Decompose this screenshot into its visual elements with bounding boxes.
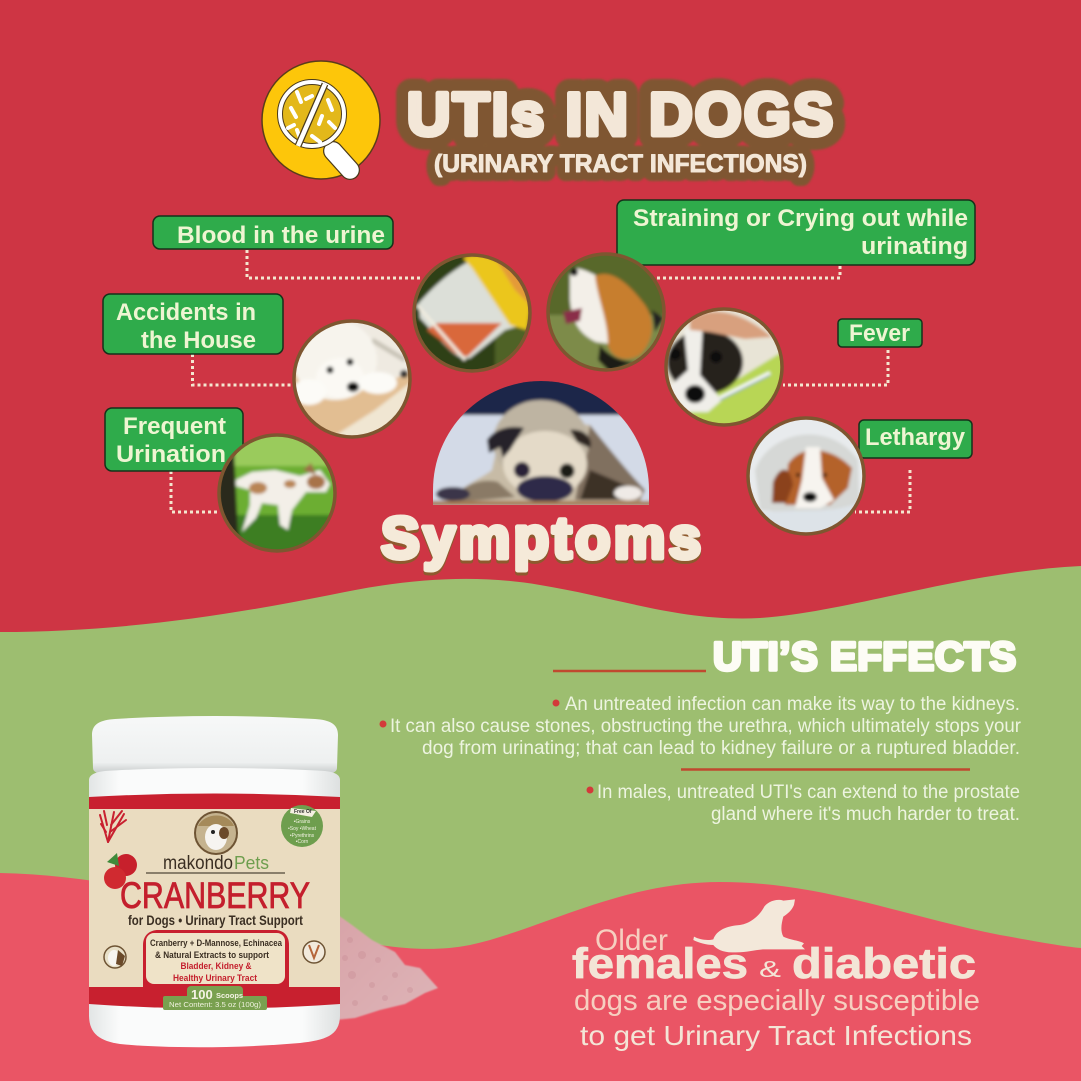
text block: older females and diabetic: diabetic <box>792 940 976 988</box>
label: frequent urination <box>105 408 243 471</box>
label: frequent urination: Frequent <box>123 413 226 440</box>
text block: older females and diabetic: & <box>759 956 781 982</box>
ingredients text: Bladder, Kidney & <box>180 961 252 972</box>
brand name: makondo <box>163 853 233 874</box>
jar label <box>89 794 340 1010</box>
icon: dog silhouette <box>693 899 805 952</box>
title: (URINARY TRACT INFECTIONS) <box>434 150 807 178</box>
label: straining or crying out: Straining or Crying out while <box>633 205 968 232</box>
title: UTIs IN DOGS <box>407 81 833 148</box>
text block: older females and diabetic <box>572 924 980 1051</box>
photo: dog urinating on tree <box>215 430 340 555</box>
label: fever: Fever <box>849 320 910 347</box>
label: accidents in the house: the House <box>141 327 256 354</box>
text block: effects: It can also cause stones, obstructing the urethra, which ultimately stops your <box>390 716 1022 737</box>
ingredients text: Cranberry + D-Mannose, Echinacea <box>150 938 283 949</box>
photo: beagle howling <box>545 250 670 375</box>
connector: fever <box>783 350 888 385</box>
product jar <box>89 716 340 1047</box>
text block: effects: dog from urinating; that can lead to kidney failure or a ruptured bladder. <box>422 738 1020 759</box>
connector: accidents in the house <box>192 354 293 385</box>
powder pile <box>335 915 438 1020</box>
photo: dog with thermometer <box>665 305 785 430</box>
brand logo <box>195 812 237 854</box>
heading: UTI's effects: UTI’S EFFECTS <box>713 635 1016 679</box>
label: straining or crying out: urinating <box>861 233 968 260</box>
brand name: Pets <box>234 853 269 873</box>
title: (URINARY TRACT INFECTIONS) <box>434 150 807 178</box>
text block: older females and diabetic: females <box>572 940 748 988</box>
scoops tag <box>163 986 267 1010</box>
icon: magnifying glass with bacteria <box>262 61 380 179</box>
label: accidents in the house <box>103 294 283 354</box>
text block: older females and diabetic: to get Urinary Tract Infections <box>580 1020 972 1051</box>
free-of badge: •Corn <box>296 839 309 845</box>
ingredients text: Healthy Urinary Tract <box>173 973 258 984</box>
jar lid <box>92 716 338 774</box>
scoops tag: 100 <box>191 987 213 1002</box>
free-of badge: •Grains <box>294 819 311 825</box>
product subtitle: for Dogs • Urinary Tract Support <box>128 913 303 928</box>
connector: frequent urination <box>171 471 219 512</box>
connector: blood in the urine <box>247 250 423 278</box>
free-of badge: •Soy •Wheat <box>288 826 317 832</box>
label: blood in the urine: Blood in the urine <box>177 222 385 249</box>
photo: urine sample jar <box>412 253 532 373</box>
connector: straining <box>657 266 840 278</box>
label: accidents in the house: Accidents in <box>116 299 256 326</box>
title: UTIs IN DOGS <box>407 81 833 148</box>
text block: effects: In males, untreated UTI's can extend to the prostate <box>597 782 1020 803</box>
jar body <box>89 768 340 1047</box>
photo: white puppy on floor <box>292 319 412 439</box>
cranberry fruit <box>104 853 137 889</box>
free-of badge: Free Of <box>294 809 312 815</box>
heading: symptoms: Symptoms <box>381 506 701 571</box>
text block: effects: An untreated infection can make its way to the kidneys. <box>565 694 1020 715</box>
product name: CRANBERRY <box>120 875 310 916</box>
label: lethargy <box>859 420 972 458</box>
label: frequent urination: Urination <box>116 441 226 468</box>
text block: effects <box>380 694 1022 825</box>
title <box>407 81 833 178</box>
label: blood in the urine <box>153 216 393 249</box>
pink wave background <box>0 873 1081 1081</box>
scoops tag: Scoops <box>216 991 243 1000</box>
text block: older females and diabetic: Older <box>595 924 668 957</box>
text block: effects: gland where it's much harder to treat. <box>711 804 1020 825</box>
ingredients text: & Natural Extracts to support <box>155 950 270 961</box>
label: lethargy: Lethargy <box>865 424 966 451</box>
connector: lethargy <box>855 470 910 512</box>
heading: symptoms: Symptoms <box>381 509 701 574</box>
text block: older females and diabetic: dogs are especially susceptible <box>574 985 980 1017</box>
free-of badge: •Pyrethrins <box>290 833 315 839</box>
photo: sad pug <box>430 378 652 508</box>
palm leaf <box>100 811 126 842</box>
photo: beagle under blanket <box>745 415 870 540</box>
brand name <box>146 853 285 874</box>
green wave background <box>0 566 1081 1081</box>
side badges <box>104 941 325 968</box>
scoops tag: Net Content: 3.5 oz (100g) <box>169 1000 262 1009</box>
label: straining or crying out <box>617 200 975 265</box>
ingredients text <box>150 938 283 984</box>
free-of badge <box>281 805 323 847</box>
